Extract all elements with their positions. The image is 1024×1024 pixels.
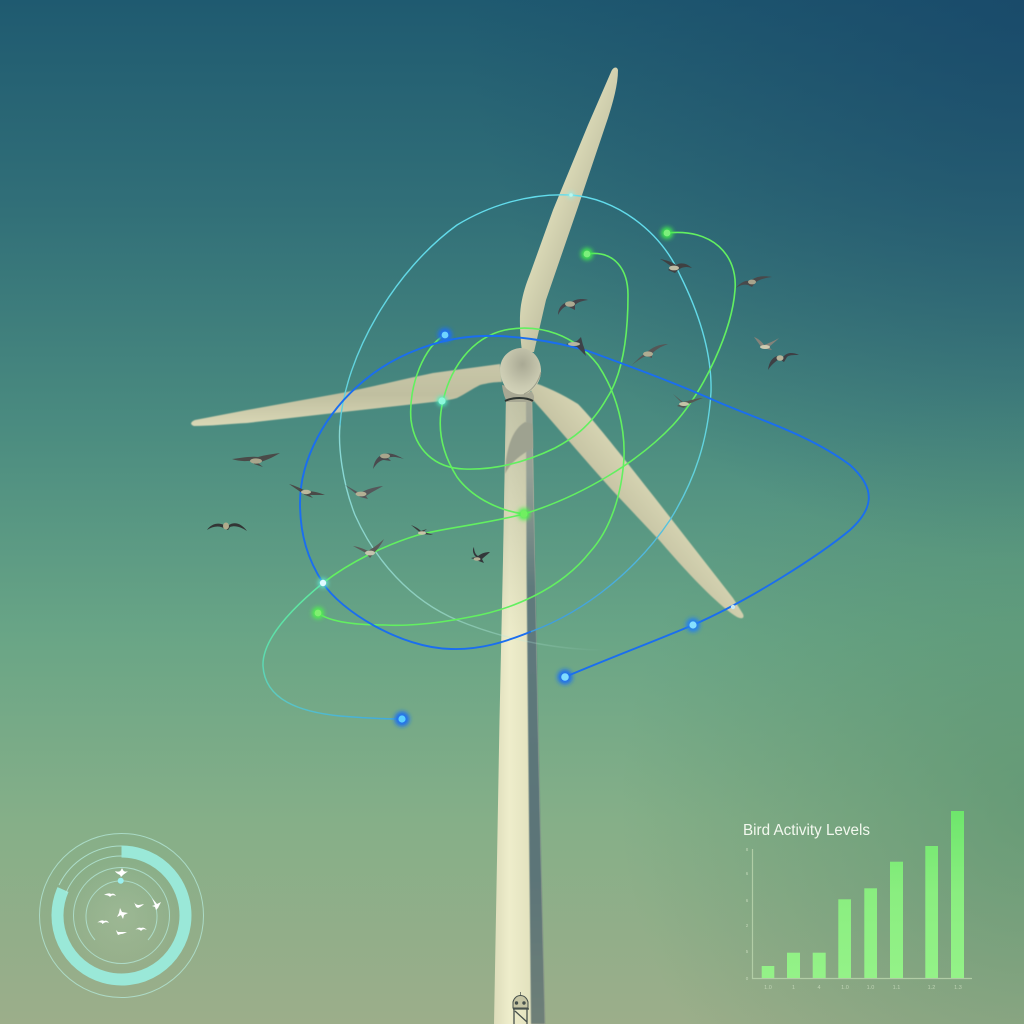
node: cyan on upper blade xyxy=(568,192,574,198)
path: cyan orbit xyxy=(340,195,711,632)
flock of birds xyxy=(207,259,799,563)
blade: upper xyxy=(520,68,618,352)
bars xyxy=(762,811,964,978)
bird xyxy=(207,522,247,531)
path: second green spiral xyxy=(318,328,624,625)
y axis labels: 8 xyxy=(746,847,749,852)
bird xyxy=(373,453,404,469)
node: pale on blade tip xyxy=(731,605,735,609)
x axis labels: 1.0 xyxy=(764,985,772,991)
tower door xyxy=(513,992,529,1024)
bird xyxy=(558,299,588,315)
gap outer arc xyxy=(59,846,122,885)
node: blue right xyxy=(686,618,700,632)
bird xyxy=(768,353,799,370)
path: pale cyan fading arc xyxy=(340,425,605,650)
node: green top xyxy=(581,248,593,260)
x axis labels: 1.2 xyxy=(928,985,935,991)
node: green on tower xyxy=(518,508,530,520)
flight paths xyxy=(263,195,869,719)
gap inner arc xyxy=(66,856,122,893)
nacelle and hub xyxy=(500,348,541,402)
y axis labels: 6 xyxy=(746,871,749,876)
y axis labels: 6 xyxy=(746,898,749,903)
node: blue lower start xyxy=(558,670,572,684)
x axis labels: 1.1 xyxy=(893,985,900,991)
white birds xyxy=(97,868,161,935)
chart title: Bird Activity Levels xyxy=(743,822,870,839)
turbine tower xyxy=(494,398,545,1024)
middle ring xyxy=(74,868,170,964)
bird xyxy=(411,525,433,535)
node: teal end xyxy=(394,712,410,726)
wind turbine xyxy=(191,68,744,1024)
bird xyxy=(673,394,703,408)
bird xyxy=(289,484,325,498)
path: long green route xyxy=(323,232,735,583)
gauge marker dot xyxy=(118,878,124,884)
node: junction white xyxy=(318,578,328,588)
node: blue top xyxy=(438,328,452,342)
path nodes xyxy=(312,192,735,726)
radial bird gauge xyxy=(40,834,204,998)
axes xyxy=(752,849,972,978)
y axis labels: 0 xyxy=(746,976,749,981)
blade: lower right xyxy=(529,381,744,618)
bar chart: bird activity levels xyxy=(743,811,972,991)
y axis labels: 2 xyxy=(746,923,749,928)
bird xyxy=(566,337,586,356)
x axis labels: 4 xyxy=(817,985,821,991)
bird xyxy=(632,344,668,365)
inner open arc xyxy=(86,881,157,940)
path: blue route xyxy=(300,336,869,677)
node: teal on left blade xyxy=(437,396,447,406)
bird xyxy=(353,539,384,558)
node: green top right xyxy=(661,227,673,239)
y axis labels xyxy=(746,847,749,981)
x axis labels: 1 xyxy=(792,985,795,991)
progress ring xyxy=(57,852,185,980)
x axis labels xyxy=(764,985,962,991)
path: inner green spiral xyxy=(411,253,628,469)
x axis labels: 1.0 xyxy=(841,985,849,991)
path: teal tail xyxy=(263,583,402,719)
bird xyxy=(471,547,490,563)
bird xyxy=(232,453,280,467)
blade: left xyxy=(191,364,502,426)
bird xyxy=(345,485,383,499)
x axis labels: 1.3 xyxy=(954,985,962,991)
bird xyxy=(736,276,772,288)
x axis labels: 1.0 xyxy=(867,985,874,991)
bird xyxy=(660,259,692,273)
outer thin ring xyxy=(40,834,204,998)
bird xyxy=(754,337,779,350)
node: green lower left xyxy=(312,607,324,619)
y axis labels: 5 xyxy=(746,949,749,954)
